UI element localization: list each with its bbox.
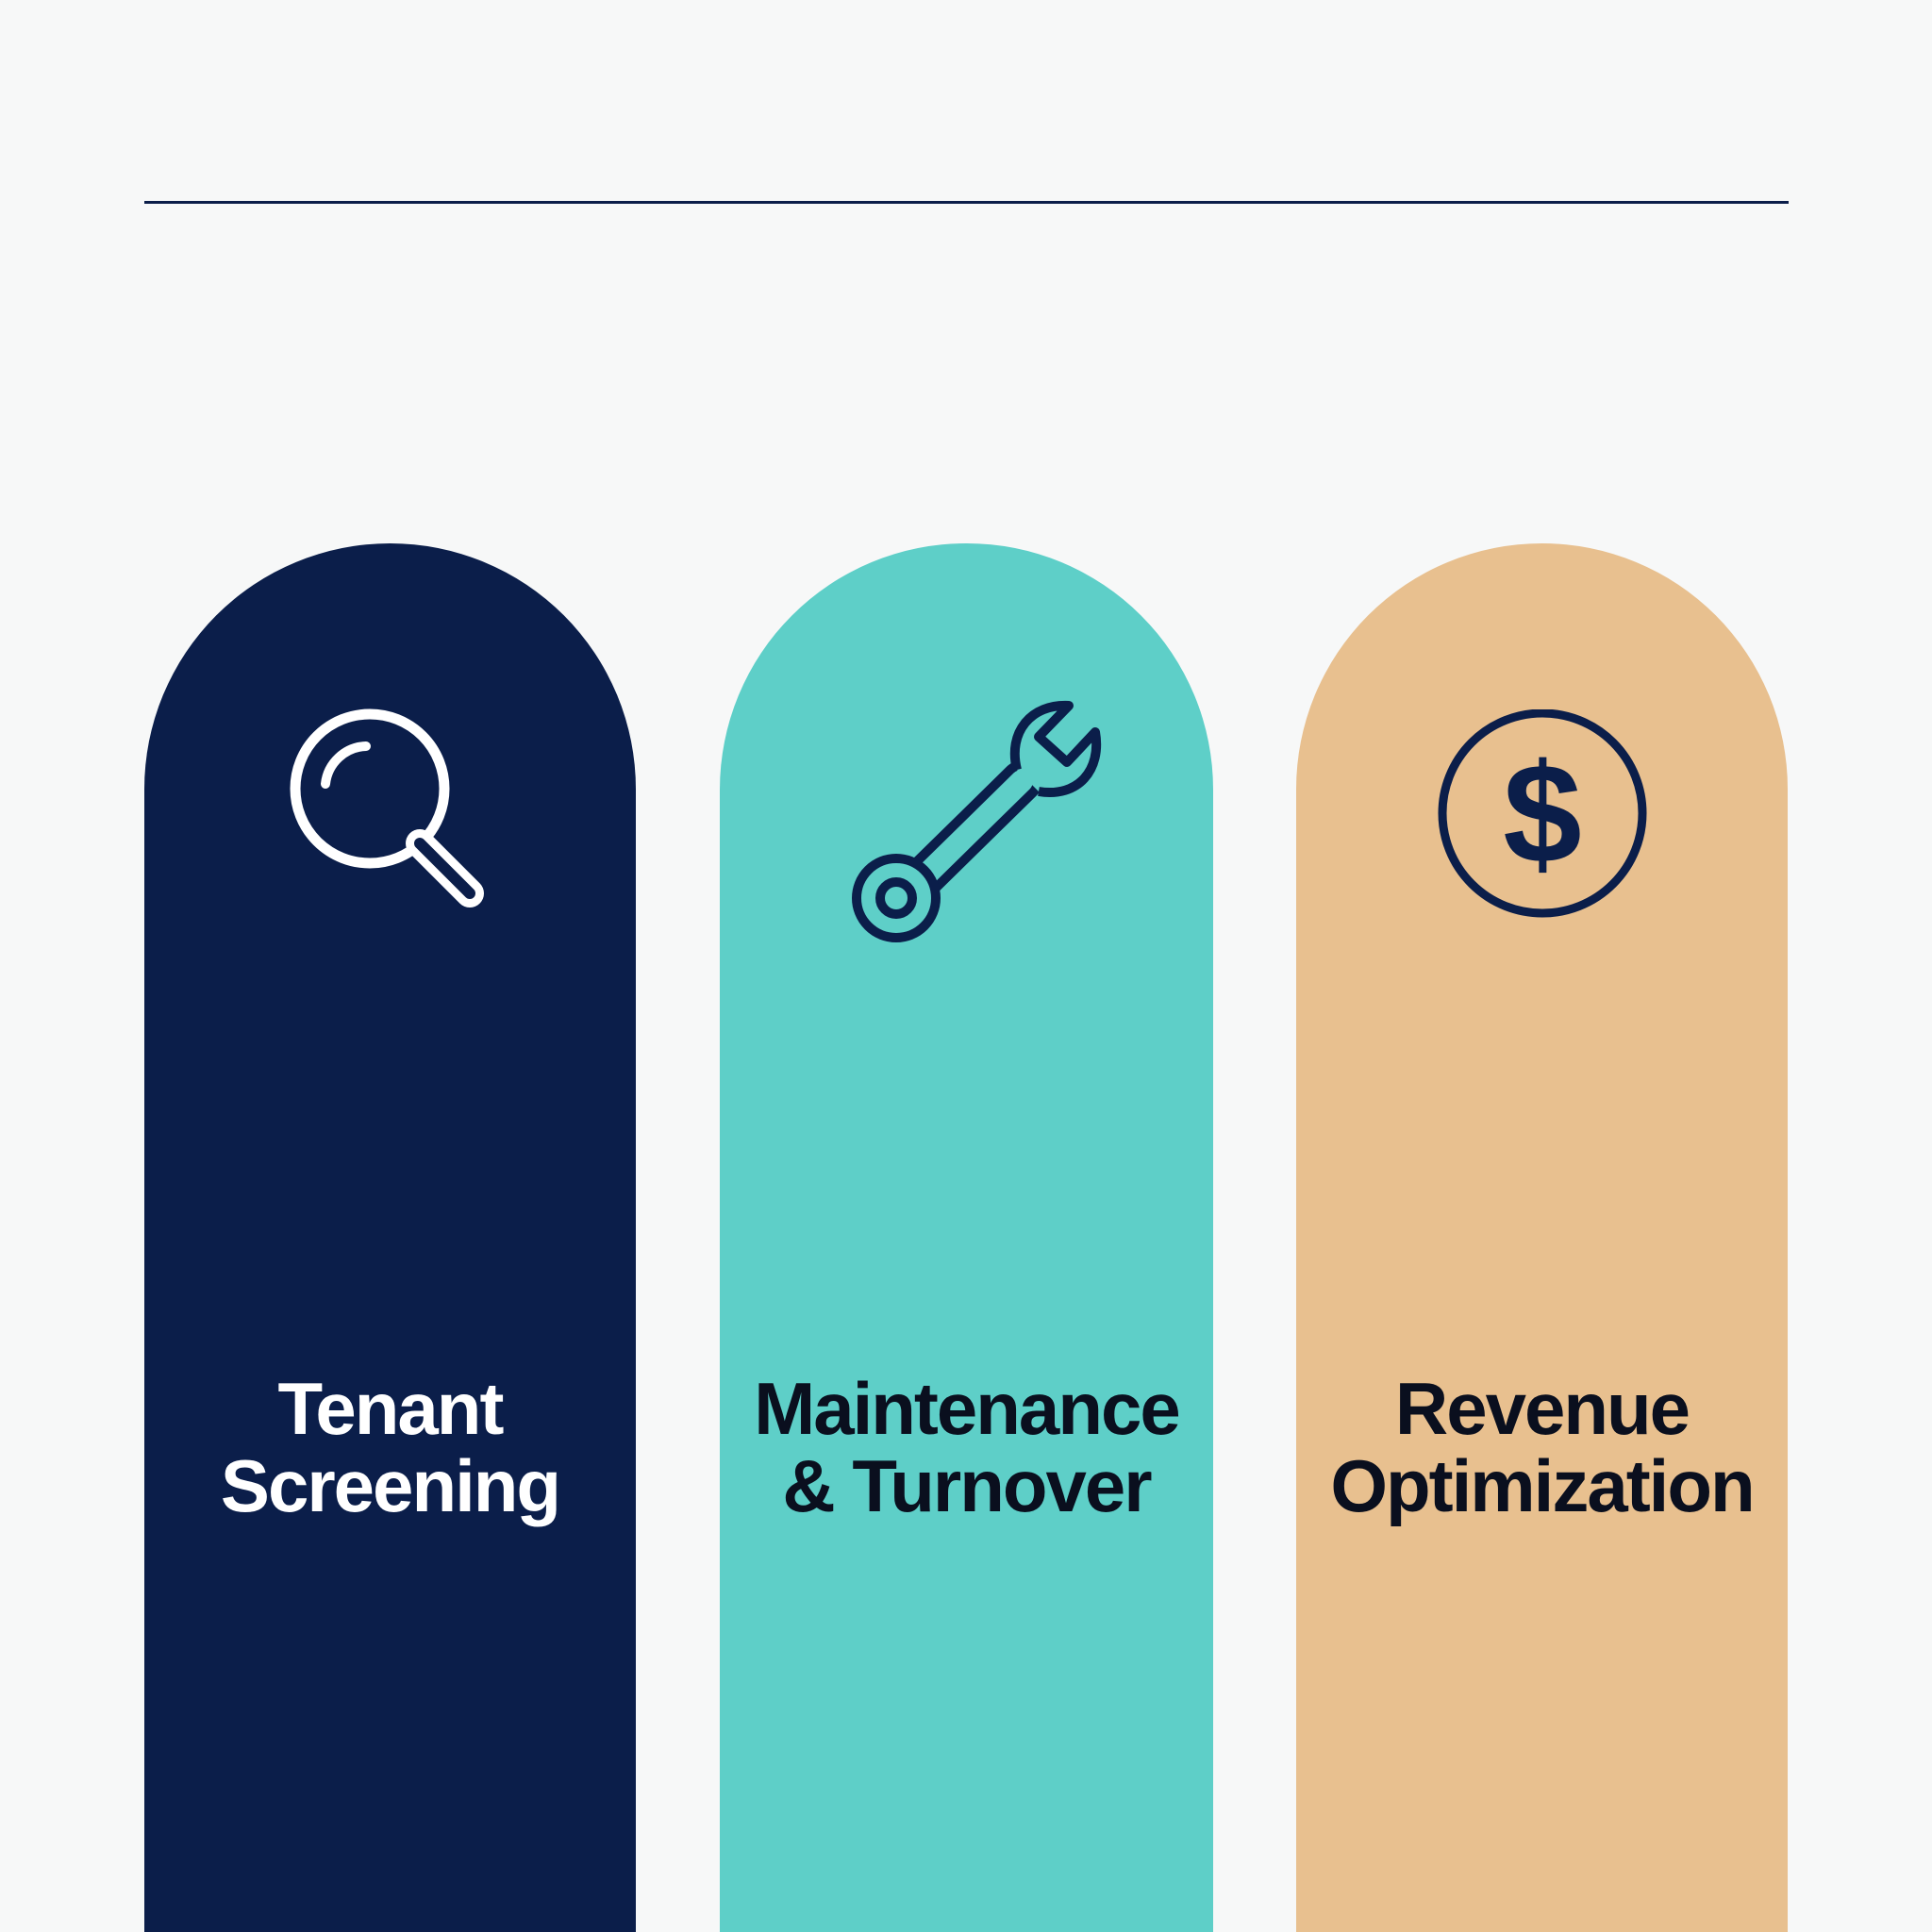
panel: tenant screening (144, 543, 636, 1932)
heading: Maintenance & Turnover: Maintenance (754, 1367, 1179, 1450)
heading: Maintenance & Turnover (754, 1367, 1179, 1527)
heading: Tenant Screening: Screening (221, 1444, 559, 1527)
heading: Revenue Optimization: Optimization (1330, 1444, 1754, 1527)
icon: magnifying glass (291, 709, 484, 908)
heading: Maintenance & Turnover: & Turnover (782, 1444, 1151, 1527)
heading: Tenant Screening: Tenant (278, 1367, 502, 1450)
icon: dollar coin: $ (1503, 734, 1582, 892)
heading: Revenue Optimization: Revenue (1395, 1367, 1689, 1450)
panel: revenue optimization (1296, 543, 1788, 1932)
icon: wrench (852, 700, 1102, 942)
heading: Revenue Optimization (1330, 1367, 1754, 1527)
heading: Tenant Screening (221, 1367, 559, 1527)
divider line (144, 201, 1789, 204)
panel: maintenance & turnover (720, 543, 1213, 1932)
icon: dollar coin (1438, 709, 1647, 917)
